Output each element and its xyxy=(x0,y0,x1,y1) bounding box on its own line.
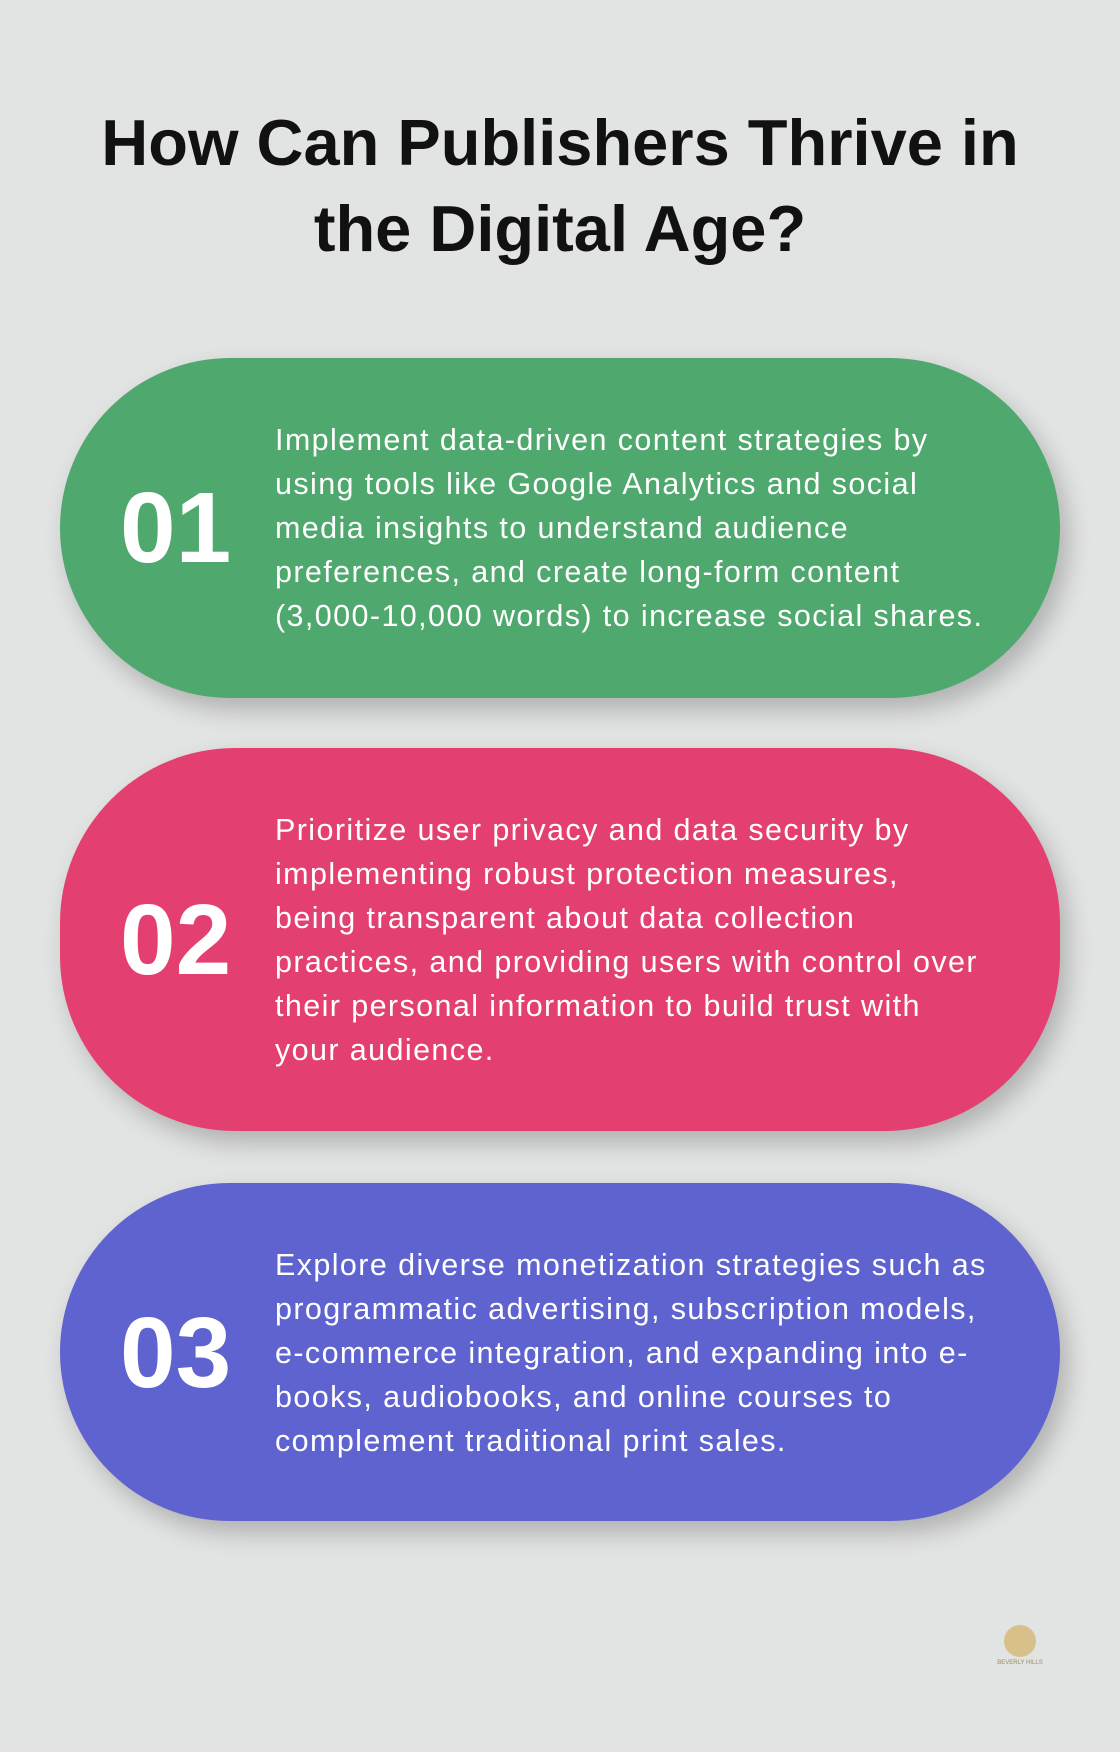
logo: BEVERLY HILLS xyxy=(997,1660,1043,1666)
text 03: books, audiobooks, and online courses to xyxy=(275,1380,892,1414)
title: the Digital Age? xyxy=(314,192,806,265)
text 01: (3,000-10,000 words) to increase social shares. xyxy=(275,599,983,633)
text 02: being transparent about data collection xyxy=(275,901,855,935)
text 02: your audience. xyxy=(275,1033,495,1067)
text 03: complement traditional print sales. xyxy=(275,1424,787,1458)
text 01: Implement data-driven content strategies by xyxy=(275,423,929,457)
panel: step 02 xyxy=(60,748,1060,1131)
text 02: their personal information to build trust with xyxy=(275,989,921,1023)
panel: step 03 xyxy=(60,1183,1060,1521)
text 03: e-commerce integration, and expanding into e- xyxy=(275,1336,969,1370)
text 01: preferences, and create long-form content xyxy=(275,555,900,589)
number 02: 02 xyxy=(120,884,231,996)
text 03: Explore diverse monetization strategies such as xyxy=(275,1248,987,1282)
logo xyxy=(997,1625,1043,1666)
text 02: Prioritize user privacy and data security by xyxy=(275,813,910,847)
text 02: implementing robust protection measures, xyxy=(275,857,899,891)
number 01: 01 xyxy=(120,472,231,584)
text 03 xyxy=(275,1248,987,1458)
text 02: practices, and providing users with control over xyxy=(275,945,978,979)
panel: step 01 xyxy=(60,358,1060,698)
number 03: 03 xyxy=(120,1297,231,1409)
text 01: using tools like Google Analytics and social xyxy=(275,467,918,501)
text 01 xyxy=(275,423,983,633)
title xyxy=(101,106,1019,265)
text 03: programmatic advertising, subscription models, xyxy=(275,1292,977,1326)
text 01: media insights to understand audience xyxy=(275,511,849,545)
text 02 xyxy=(275,813,978,1067)
title: How Can Publishers Thrive in xyxy=(101,106,1019,179)
